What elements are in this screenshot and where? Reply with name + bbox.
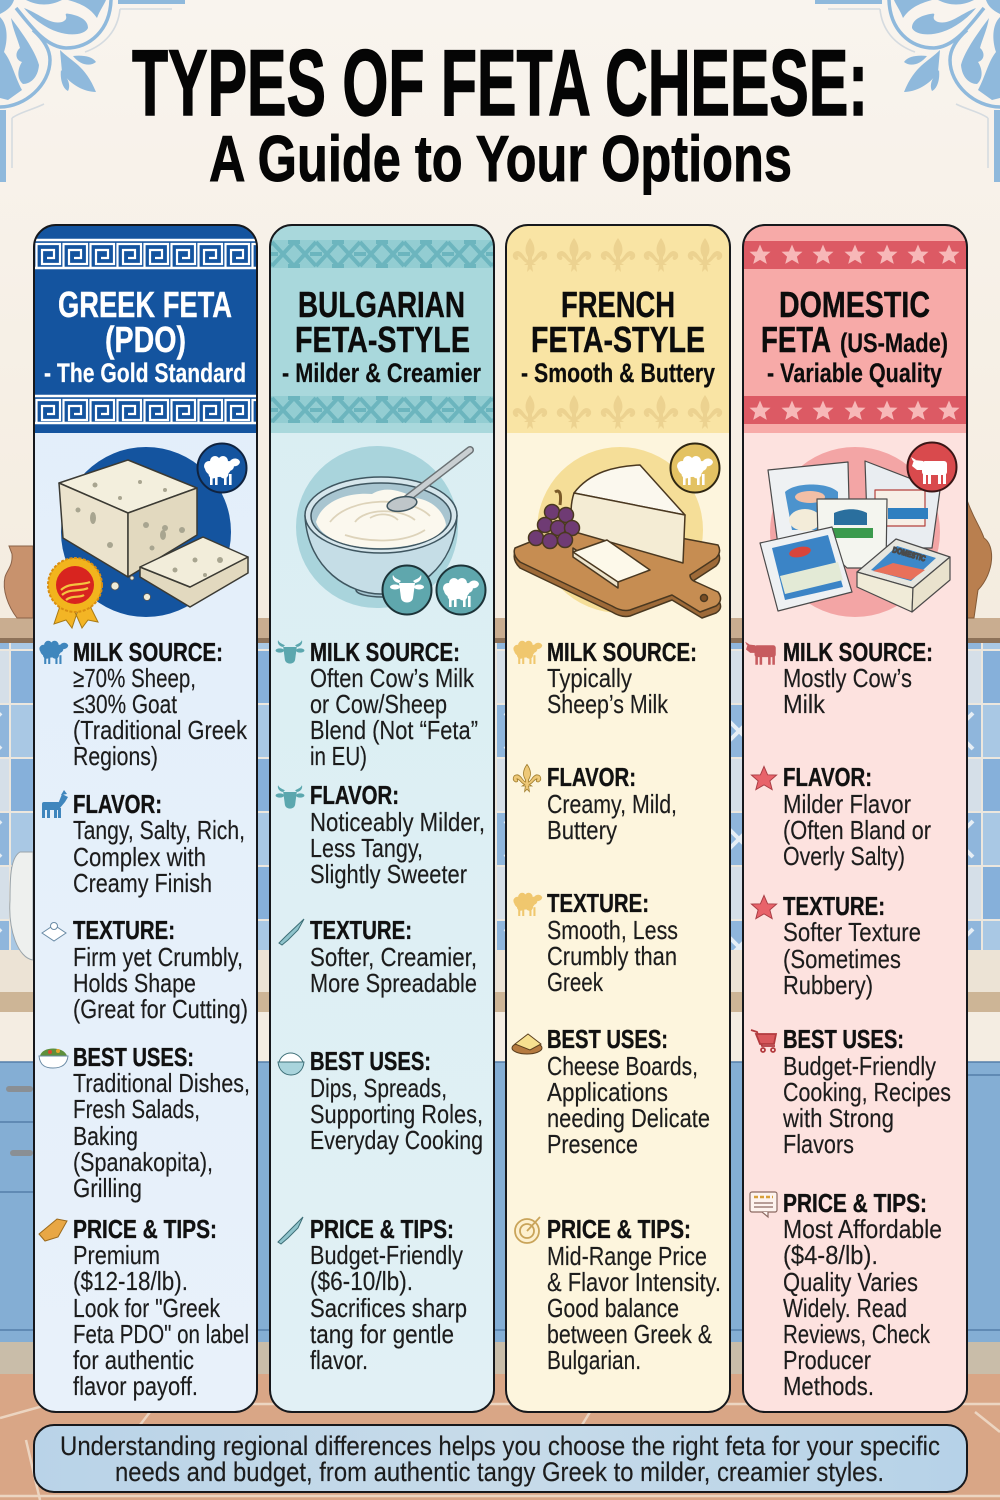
text: price and tips: Look for "Greek: [73, 1293, 221, 1323]
text: price and tips: Mid-Range Price: [547, 1241, 707, 1271]
text: flavor: (Often Bland or: [783, 815, 931, 845]
corner ornament top left: [0, 0, 185, 182]
text: texture: TEXTURE:: [783, 893, 885, 921]
callout: summary bar: needs and budget, from authentic tangy Greek to milder, creamier styles.: [115, 1457, 884, 1487]
icon: goat: [42, 790, 68, 818]
text: texture: Rubbery): [783, 970, 873, 1000]
text: best uses: Cheese Boards,: [547, 1051, 698, 1081]
text: texture: (Great for Cutting): [73, 994, 248, 1024]
text: best uses: Flavors: [783, 1129, 854, 1159]
text: best uses: [512, 1026, 710, 1159]
text: texture: TEXTURE:: [310, 917, 412, 945]
callout: summary bar: [34, 1425, 967, 1492]
text: price and tips: ($12-18/lb).: [73, 1266, 188, 1296]
icon: sheep badge: [670, 444, 720, 492]
text: best uses: Grilling: [73, 1173, 142, 1203]
text: best uses: [751, 1026, 951, 1159]
icon: golden sheep: [513, 893, 542, 916]
text: flavor: Creamy, Mild,: [547, 789, 677, 819]
icon: small bowl: [278, 1053, 304, 1075]
text: flavor: [42, 790, 245, 898]
text: price and tips: Methods.: [783, 1371, 874, 1401]
text: best uses: [39, 1044, 250, 1203]
text: flavor: FLAVOR:: [547, 764, 636, 792]
text: best uses: with Strong: [782, 1103, 894, 1133]
header: Domestic: DOMESTIC: [779, 284, 930, 325]
panel: French feta-style: [506, 225, 730, 1412]
text: milk source: MILK SOURCE:: [73, 639, 223, 667]
text: flavor: Milder Flavor: [783, 789, 911, 819]
icon: cow badge: [382, 566, 432, 614]
text: flavor: Creamy Finish: [73, 868, 212, 898]
icon: shopping cart: [751, 1030, 776, 1052]
icon: red cow: [745, 642, 776, 665]
text: milk source: Blend (Not “Feta”: [310, 715, 478, 745]
text: best uses: [278, 1048, 483, 1155]
text: flavor: [513, 764, 677, 845]
illustration: cheese wedge on board: [514, 447, 721, 618]
icon: knife: [278, 1217, 303, 1244]
header: Greek feta: (PDO): [105, 319, 186, 360]
icon: sheep badge: [436, 566, 486, 614]
text: flavor: Complex with: [73, 842, 206, 872]
text: best uses: Dips, Spreads,: [310, 1073, 447, 1103]
icon: star: [751, 766, 777, 790]
text: price and tips: Bulgarian.: [547, 1345, 641, 1375]
icon: cow badge: [908, 442, 956, 492]
panel: Greek feta: [34, 225, 257, 1412]
text: price and tips: for authentic: [73, 1345, 194, 1375]
icon: target: [515, 1217, 540, 1243]
text: texture: TEXTURE:: [547, 890, 649, 918]
header: Greek feta: [34, 225, 257, 433]
text: price and tips: Premium: [73, 1240, 160, 1270]
header: Bulgarian: FETA-STYLE: [295, 319, 470, 360]
illustration: packaged feta assortment: DOMESTIC: [891, 545, 927, 563]
text: best uses: Supporting Roles,: [310, 1099, 483, 1129]
text: flavor: Slightly Sweeter: [310, 859, 467, 889]
header: Domestic: [743, 225, 967, 433]
header: French: - Smooth & Buttery: [521, 358, 715, 388]
text: best uses: BEST USES:: [547, 1026, 668, 1054]
text: milk source: ≥70% Sheep,: [73, 663, 196, 693]
text: price and tips: PRICE & TIPS:: [310, 1216, 454, 1244]
text: flavor: [751, 764, 931, 871]
icon: fleur-de-lis: [513, 764, 541, 792]
corner ornament top right: [815, 0, 1000, 182]
text: milk source: [39, 639, 248, 771]
text: milk source: in EU): [310, 741, 367, 771]
icon: cheese on board: [512, 1034, 542, 1054]
text: best uses: Presence: [547, 1129, 638, 1159]
header: Bulgarian: [270, 225, 494, 433]
illustration: packaged feta assortment: [760, 447, 950, 617]
header: Bulgarian: - Milder & Creamier: [282, 358, 481, 388]
text: milk source: [745, 639, 933, 719]
text: milk source: MILK SOURCE:: [783, 639, 933, 667]
icon: PDO seal: [48, 558, 102, 628]
text: price and tips: [278, 1216, 467, 1375]
white pitcher on left counter: [10, 852, 33, 960]
text: texture: Softer Texture: [783, 917, 921, 947]
text: flavor: FLAVOR:: [310, 782, 399, 810]
icon: blue sheep: [39, 641, 68, 664]
header: Domestic: (US-Made): [840, 328, 948, 358]
text: price and tips: tang for gentle: [310, 1319, 454, 1349]
text: best uses: BEST USES:: [310, 1048, 431, 1076]
text: milk source: ≤30% Goat: [73, 689, 178, 719]
icon: golden sheep: [513, 641, 542, 664]
header: Domestic: FETA: [761, 319, 831, 360]
text: price and tips: Most Affordable: [783, 1214, 942, 1244]
icon: cow head: [276, 785, 304, 809]
header: Greek feta: GREEK FETA: [58, 284, 232, 325]
panel: Bulgarian feta-style: [270, 225, 494, 1412]
text: texture: (Sometimes: [783, 944, 901, 974]
text: best uses: BEST USES:: [73, 1044, 194, 1072]
text: price and tips: flavor payoff.: [73, 1371, 198, 1401]
text: price and tips: ($6-10/lb).: [310, 1266, 413, 1296]
text: texture: [279, 917, 477, 998]
jug on right shelf: [967, 500, 992, 618]
text: milk source: MILK SOURCE:: [310, 639, 460, 667]
text: milk source: MILK SOURCE:: [547, 639, 697, 667]
text: milk source: Sheep’s Milk: [547, 689, 669, 719]
text: price and tips: PRICE & TIPS:: [783, 1190, 927, 1218]
text: price and tips: Sacrifices sharp: [310, 1293, 467, 1323]
text: best uses: Applications: [547, 1077, 668, 1107]
text: texture: [42, 917, 248, 1024]
text: milk source: [513, 639, 697, 719]
text: best uses: Fresh Salads,: [73, 1094, 200, 1124]
icon: review note: [750, 1192, 777, 1217]
pot on left shelf: [4, 546, 33, 618]
text: milk source: Typically: [547, 663, 632, 693]
text: flavor: Less Tangy,: [310, 833, 423, 863]
text: price and tips: [750, 1190, 942, 1401]
text: best uses: (Spanakopita),: [73, 1147, 213, 1177]
text: texture: Crumbly than: [547, 941, 677, 971]
text: price and tips: PRICE & TIPS:: [547, 1216, 691, 1244]
text: price and tips: & Flavor Intensity.: [547, 1267, 721, 1297]
icon: star: [751, 895, 777, 919]
text: texture: [751, 893, 921, 1000]
text: flavor: FLAVOR:: [783, 764, 872, 792]
header: Bulgarian: BULGARIAN: [298, 284, 465, 325]
header: Greek feta: - The Gold Standard: [44, 358, 246, 388]
text: best uses: Everyday Cooking: [310, 1125, 483, 1155]
text: price and tips: Budget-Friendly: [310, 1240, 463, 1270]
text: texture: Holds Shape: [73, 968, 196, 998]
text: texture: Firm yet Crumbly,: [73, 942, 243, 972]
text: milk source: Mostly Cow’s: [783, 663, 912, 693]
icon: cheese crumbles: [42, 922, 66, 941]
text: best uses: BEST USES:: [783, 1026, 904, 1054]
text: price and tips: Producer: [783, 1345, 871, 1375]
text: price and tips: Good balance: [547, 1293, 679, 1323]
text: price and tips: [39, 1216, 249, 1401]
text: best uses: Budget-Friendly: [783, 1051, 936, 1081]
text: best uses: Traditional Dishes,: [73, 1068, 250, 1098]
icon: pastry: [39, 1219, 67, 1241]
icon: sheep badge: [198, 444, 246, 492]
text: texture: Softer, Creamier,: [310, 942, 477, 972]
icon: salad bowl: [39, 1048, 68, 1068]
text: milk source: Often Cow’s Milk: [310, 663, 475, 693]
text: best uses: needing Delicate: [547, 1103, 710, 1133]
text: milk source: or Cow/Sheep: [310, 689, 447, 719]
text: price and tips: flavor.: [310, 1345, 368, 1375]
text: texture: [513, 890, 678, 997]
text: flavor: Overly Salty): [783, 841, 905, 871]
text: best uses: Cooking, Recipes: [783, 1077, 951, 1107]
text: price and tips: between Greek &: [547, 1319, 712, 1349]
text: flavor: Tangy, Salty, Rich,: [73, 815, 245, 845]
header: French: FETA-STYLE: [531, 319, 705, 360]
text: texture: TEXTURE:: [73, 917, 175, 945]
text: flavor: Buttery: [547, 815, 617, 845]
text: milk source: Regions): [73, 741, 158, 771]
text: best uses: Baking: [73, 1121, 138, 1151]
text: milk source: [276, 639, 478, 771]
text: flavor: Noticeably Milder,: [310, 807, 485, 837]
text: texture: Smooth, Less: [547, 915, 678, 945]
text: texture: Greek: [547, 967, 604, 997]
title: [132, 30, 868, 195]
text: price and tips: Quality Varies: [783, 1267, 918, 1297]
illustration: feta block: [59, 447, 248, 617]
text: price and tips: Reviews, Check: [783, 1319, 931, 1349]
illustration: creamy bowl with spoon: [296, 446, 470, 608]
text: flavor: [276, 782, 485, 889]
text: milk source: (Traditional Greek: [73, 715, 248, 745]
icon: knife: [279, 919, 304, 945]
text: price and tips: ($4-8/lb).: [783, 1240, 878, 1270]
text: price and tips: Widely. Read: [783, 1293, 907, 1323]
text: milk source: Milk: [783, 689, 826, 719]
icon: cow head: [276, 640, 304, 664]
panel: Domestic feta: [743, 225, 967, 1412]
title: A Guide to Your Options: [209, 122, 792, 195]
text: price and tips: [515, 1216, 721, 1375]
text: price and tips: Feta PDO" on label: [73, 1319, 249, 1349]
header: French: FRENCH: [561, 284, 675, 325]
header: French: [506, 225, 730, 433]
header: Domestic: - Variable Quality: [767, 358, 942, 388]
text: price and tips: PRICE & TIPS:: [73, 1216, 217, 1244]
text: flavor: FLAVOR:: [73, 791, 162, 819]
text: texture: More Spreadable: [310, 968, 477, 998]
